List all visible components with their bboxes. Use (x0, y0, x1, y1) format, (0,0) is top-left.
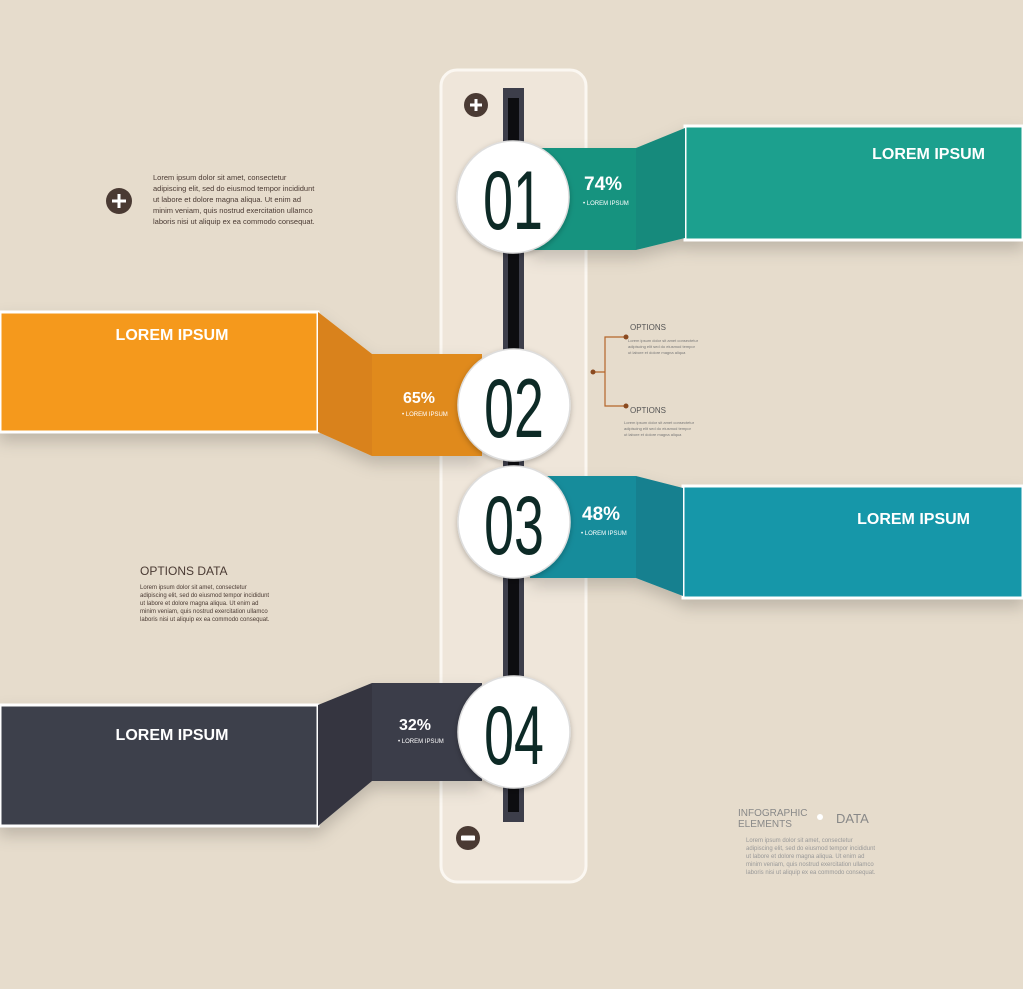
options bracket: adipiscing elit sed do eiusmod tempor (624, 426, 692, 431)
ribbon 2: orange (0, 312, 482, 456)
text block: options data: ut labore et dolore magna aliqua. Ut enim ad (140, 601, 258, 607)
circle 03: 03 (484, 478, 544, 572)
panel: vertical track (441, 70, 586, 882)
text block: top left: ut labore et dolore magna aliqua. Ut enim ad (153, 195, 301, 204)
circle 01 (457, 141, 569, 253)
ribbon 1: teal: 74% (584, 174, 622, 195)
circle 02: 02 (484, 361, 544, 455)
ribbon 3: blue teal: • LOREM IPSUM (581, 531, 627, 537)
text block: top left: laboris nisi ut aliquip ex ea commodo consequat. (153, 217, 315, 226)
text block: infographic elements data: ut labore et dolore magna aliqua. Ut enim ad (746, 854, 864, 860)
text block: infographic elements data: INFOGRAPHIC (738, 808, 807, 819)
text block: infographic elements data: Lorem ipsum dolor sit amet, consectetur (746, 838, 853, 844)
ribbon 4: dark: • LOREM IPSUM (398, 739, 444, 745)
options bracket: ut labore et dolore magna aliqua (624, 432, 682, 437)
text block: top left: Lorem ipsum dolor sit amet, consectetur (153, 173, 287, 182)
text block: infographic elements data: adipiscing elit, sed do eiusmod tempor incididunt (746, 846, 875, 852)
circle 04 (458, 676, 570, 788)
ribbon 4: dark (0, 683, 482, 826)
ribbon 4: dark: 32% (399, 717, 431, 734)
text block: options data: OPTIONS DATA (140, 564, 228, 578)
text block: top left (153, 173, 315, 226)
options bracket: OPTIONS (630, 406, 666, 415)
ribbon 1: teal: LOREM IPSUM (872, 146, 985, 163)
ribbon 2: orange: LOREM IPSUM (116, 327, 228, 344)
options bracket: ut labore et dolore magna aliqua (628, 350, 686, 355)
ribbon 3: blue teal (530, 476, 1023, 598)
ribbon 3: blue teal: LOREM IPSUM (857, 511, 970, 528)
options bracket: adipiscing elit sed do eiusmod tempor (628, 344, 696, 349)
ribbon 3: blue teal: 48% (582, 504, 620, 525)
ribbon 4: dark: LOREM IPSUM (116, 727, 228, 744)
circle 01: 01 (483, 153, 543, 247)
text block: infographic elements data: ELEMENTS (738, 819, 792, 830)
text block: options data: adipiscing elit, sed do eiusmod tempor incididunt (140, 593, 269, 599)
icon: left plus (106, 188, 132, 214)
icon: plus (464, 93, 488, 117)
options bracket: Lorem ipsum dolor sit amet consectetur (628, 338, 699, 343)
ribbon 1: teal: • LOREM IPSUM (583, 201, 629, 207)
circle 04: 04 (484, 688, 544, 782)
ribbon 2: orange: • LOREM IPSUM (402, 412, 448, 418)
options bracket: Lorem ipsum dolor sit amet consectetur (624, 420, 695, 425)
options bracket: OPTIONS (630, 323, 666, 332)
text block: options data: minim veniam, quis nostrud exercitation ullamco (140, 609, 268, 615)
text block: infographic elements data: DATA (836, 811, 869, 826)
text block: infographic elements data: minim veniam, quis nostrud exercitation ullamco (746, 862, 874, 868)
text block: options data: laboris nisi ut aliquip ex ea commodo consequat. (140, 617, 270, 623)
circle 03 (458, 466, 570, 578)
text block: infographic elements data (738, 808, 876, 876)
text block: options data: Lorem ipsum dolor sit amet, consectetur (140, 585, 247, 591)
ribbon 1: teal (530, 126, 1023, 250)
icon: minus (456, 826, 480, 850)
text block: top left: adipiscing elit, sed do eiusmod tempor incididunt (153, 184, 315, 193)
options bracket (590, 323, 699, 437)
circle 02 (458, 349, 570, 461)
text block: options data (140, 564, 270, 623)
ribbon 2: orange: 65% (403, 390, 435, 407)
text block: infographic elements data: laboris nisi ut aliquip ex ea commodo consequat. (746, 870, 876, 876)
text block: top left: minim veniam, quis nostrud exercitation ullamco (153, 206, 313, 215)
